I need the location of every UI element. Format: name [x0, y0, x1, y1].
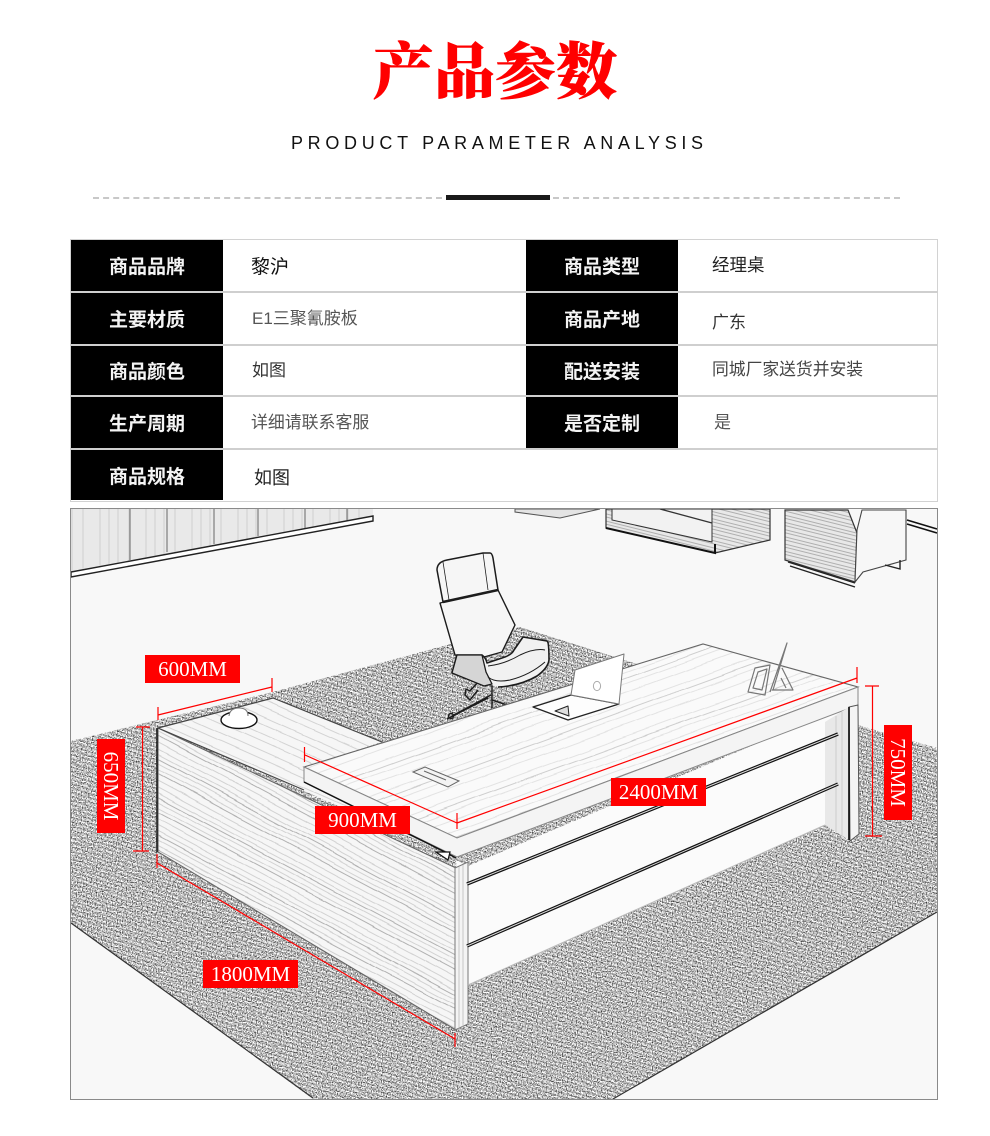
label: 750MM: [884, 725, 912, 820]
dimension line: 2400MM: [457, 667, 857, 823]
dimension line: 600MM: [158, 678, 272, 720]
row label: 主要材质: 主要材质: [109, 310, 185, 331]
row label: 商品品牌: 商品品牌: [109, 257, 185, 278]
row value: 如图: 如图: [254, 468, 290, 488]
image frame: [70, 508, 938, 1100]
row value: 详细请联系客服: 详细请联系客服: [251, 413, 369, 432]
photo frame and pen: [748, 643, 793, 695]
section divider: [93, 195, 900, 200]
row value: E1三聚氰胺板: E1三聚氰胺板: [252, 309, 358, 328]
label: 600MM: [145, 655, 240, 683]
label: 650MM: [97, 739, 125, 833]
chair back: [440, 590, 515, 657]
row label: 主要材质: [71, 293, 223, 344]
row label: 商品规格: [71, 450, 223, 500]
desk: [140, 640, 865, 1040]
right leg: [825, 707, 849, 840]
row value: 是: 是: [714, 413, 731, 432]
dimension line: 750MM: [865, 686, 882, 836]
floor: [70, 508, 938, 1100]
subtitle: PRODUCT PARAMETER ANALYSIS: [291, 133, 708, 153]
label: 1800MM: 1800MM: [211, 962, 290, 986]
dimension line: 650MM: [133, 727, 150, 851]
row value: 广东: 广东: [712, 313, 746, 332]
parameter table: [70, 239, 938, 502]
row label: 商品产地: [526, 293, 678, 344]
row label: 商品品牌: [71, 240, 223, 291]
main desk edge: [304, 687, 858, 857]
label: 650MM: 650MM: [99, 752, 123, 821]
dimension line: 900MM: [304, 747, 457, 829]
dimension line: 1800MM: [157, 854, 455, 1047]
main desk top: [295, 640, 865, 845]
title: 产品参数: [373, 40, 617, 107]
row label: 商品颜色: 商品颜色: [109, 362, 185, 383]
office chair: [437, 553, 549, 719]
panel end strip: [455, 862, 468, 1030]
carpet: [71, 627, 937, 1099]
row label: 生产周期: 生产周期: [109, 414, 185, 435]
row label: 商品类型: [526, 240, 678, 291]
drawer bar lower: [467, 784, 838, 946]
row value: 同城厂家送货并安装: 同城厂家送货并安装: [712, 360, 863, 379]
row label: 商品颜色: [71, 346, 223, 395]
row label: 配送安装: [526, 346, 678, 395]
row label: 生产周期: [71, 397, 223, 448]
desk dimension drawing: [71, 509, 937, 1099]
label: 2400MM: 2400MM: [619, 780, 698, 804]
row label: 配送安装: 配送安装: [564, 362, 640, 383]
row label: 商品产地: 商品产地: [564, 310, 640, 331]
headrest: [437, 553, 498, 602]
row value: 经理桌: 经理桌: [712, 255, 764, 275]
modesty panel: [456, 705, 848, 985]
label: 900MM: 900MM: [328, 808, 397, 832]
cable grommet: [413, 767, 459, 787]
wall panels: [71, 509, 373, 577]
row value: 如图: 如图: [252, 361, 286, 380]
return top surface: [160, 698, 435, 848]
drawer bar upper: [467, 734, 838, 884]
laptop: [533, 654, 624, 720]
seat shell: [452, 637, 549, 687]
row label: 是否定制: [526, 397, 678, 448]
label: 600MM: 600MM: [158, 657, 227, 681]
cup and saucer: [221, 708, 257, 728]
row value: 黎沪: 黎沪: [251, 257, 289, 278]
background cabinets: [515, 509, 937, 587]
row label: 商品类型: 商品类型: [564, 257, 640, 278]
row label: 是否定制: 是否定制: [564, 414, 640, 435]
chair base: [447, 682, 510, 719]
row label: 商品规格: 商品规格: [109, 466, 185, 488]
return side panel: [158, 729, 454, 1028]
label: 900MM: [315, 806, 410, 834]
label: 750MM: 750MM: [886, 738, 910, 807]
